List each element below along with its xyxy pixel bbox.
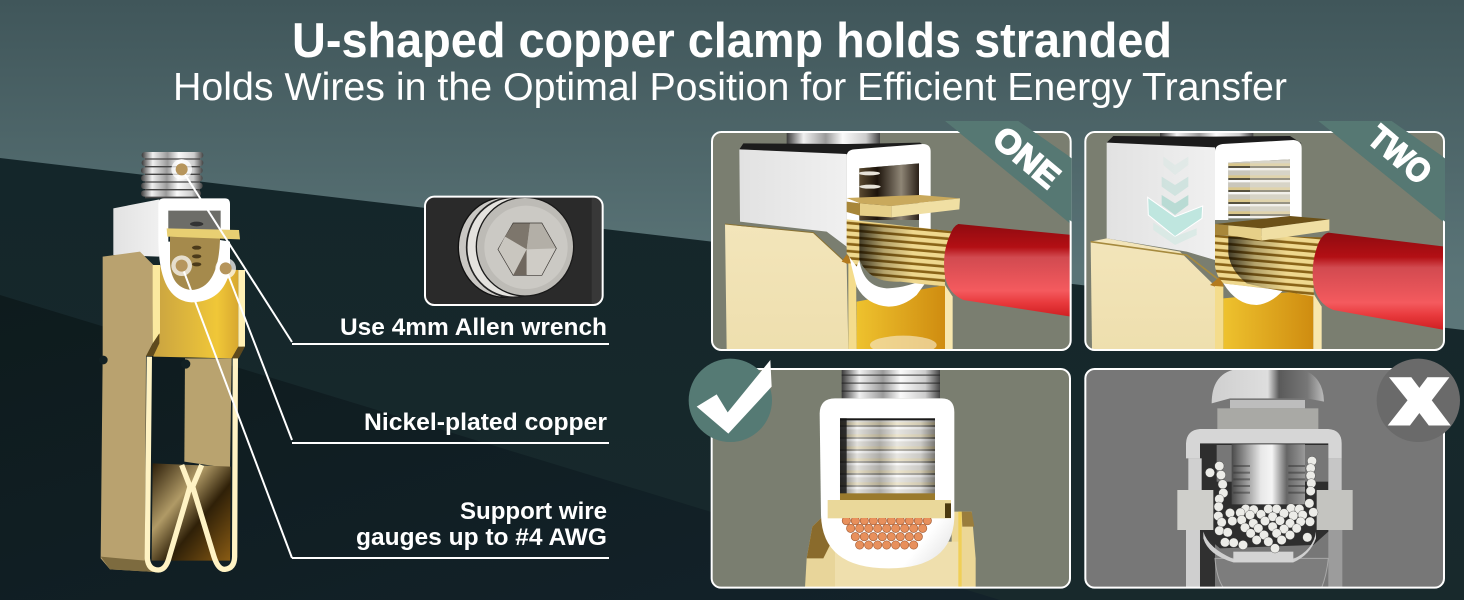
gold edge strips bbox=[848, 263, 857, 350]
ribbon bbox=[1334, 133, 1443, 222]
pressure plate bbox=[847, 195, 960, 217]
screw thread bbox=[786, 133, 880, 144]
screw thread bbox=[842, 369, 940, 398]
inner gold section bbox=[1223, 290, 1313, 350]
wire insulation bbox=[944, 224, 1072, 317]
gold plate bbox=[725, 224, 848, 350]
panel: step two bbox=[1085, 119, 1455, 350]
label: Allen wrench: Use 4mm Allen wrench bbox=[340, 314, 607, 341]
copper strands bbox=[847, 219, 955, 287]
leader line: gauges bbox=[292, 557, 609, 559]
subtitle: Holds Wires in the Optimal Position for Efficient Energy Transfer bbox=[173, 66, 1287, 109]
label: nickel: Nickel-plated copper bbox=[364, 409, 607, 436]
gold edge strips bbox=[1215, 286, 1223, 350]
silver block bbox=[1107, 136, 1302, 149]
gold body bbox=[805, 516, 837, 588]
white U-clamp bbox=[820, 398, 954, 568]
panel: Allen screw photo bbox=[425, 197, 603, 305]
silver block bbox=[739, 143, 931, 155]
lower cup bbox=[1203, 532, 1316, 562]
ribbon bbox=[960, 133, 1070, 223]
side pads bbox=[1177, 490, 1213, 530]
leader line: Allen wrench bbox=[292, 343, 609, 345]
callout dots bbox=[171, 159, 236, 279]
icon: check mark bbox=[689, 359, 772, 442]
icon: X badge: X bbox=[1396, 370, 1443, 435]
copper strands bbox=[1215, 235, 1323, 297]
label: gauges: Support wire bbox=[460, 498, 607, 525]
thread in window bbox=[1228, 159, 1290, 218]
inner gold section bbox=[857, 285, 945, 350]
lower interior bbox=[152, 463, 231, 561]
panel: step one bbox=[712, 120, 1082, 354]
spring contacts bbox=[147, 357, 235, 570]
white clamp bbox=[847, 144, 931, 307]
screw head bbox=[458, 197, 574, 297]
callout: wire gauges bbox=[292, 498, 609, 558]
pressure plate bbox=[828, 500, 951, 518]
interior bbox=[1200, 443, 1328, 548]
silver block bbox=[113, 199, 159, 257]
window interior bbox=[859, 163, 919, 220]
gold plate bbox=[1091, 238, 1215, 350]
white clamp bbox=[1215, 140, 1302, 220]
icon: X badge bbox=[1377, 359, 1460, 442]
leader line: nickel bbox=[292, 442, 609, 444]
ribbon label: ONE bbox=[985, 120, 1067, 196]
pressure plate bbox=[1215, 216, 1329, 241]
middle gold section bbox=[153, 265, 238, 358]
cream edge strips bbox=[153, 265, 160, 344]
label: gauges: gauges up to #4 AWG bbox=[356, 524, 607, 551]
scattered strands bbox=[1205, 456, 1318, 553]
panel: correct cross-section bbox=[689, 359, 1070, 588]
panel: incorrect cross-section bbox=[1085, 359, 1460, 588]
front plate bbox=[101, 252, 155, 572]
wire insulation bbox=[1313, 233, 1445, 330]
screw thread bbox=[1160, 133, 1254, 137]
arrow: clamping direction bbox=[1148, 157, 1203, 245]
threaded screw bbox=[141, 152, 203, 198]
bracket bbox=[1186, 429, 1342, 458]
title: U-shaped copper clamp holds stranded bbox=[292, 14, 1172, 68]
thread inside bbox=[840, 418, 935, 503]
copper strands bbox=[842, 516, 931, 549]
pressure plate bbox=[167, 228, 240, 239]
grey clamp legs bbox=[1186, 530, 1200, 588]
leader lines bbox=[182, 169, 292, 558]
U-shaped white clamp bbox=[158, 198, 230, 302]
dome bolt head bbox=[1212, 369, 1324, 403]
screw shaft bbox=[1232, 444, 1305, 504]
ribbon label: TWO bbox=[1361, 119, 1438, 192]
clamp illustration bbox=[99, 152, 292, 572]
window interior bbox=[168, 208, 222, 232]
back plate bbox=[184, 358, 232, 468]
